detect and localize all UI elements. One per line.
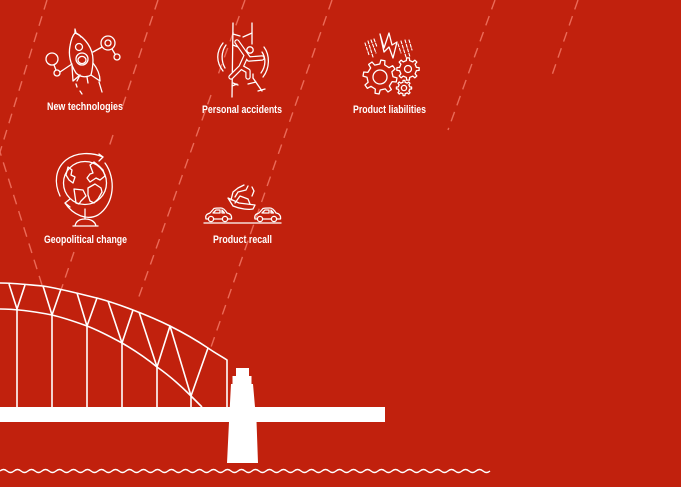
label: Product liabilities: Product liabilities bbox=[353, 104, 426, 116]
water wave bbox=[0, 470, 490, 472]
icon: falling from ladder bbox=[218, 23, 268, 97]
icon: rocket bbox=[46, 29, 120, 94]
icon: cars bbox=[204, 185, 281, 223]
label: New technologies: New technologies bbox=[47, 101, 123, 113]
icon: globe bbox=[56, 154, 112, 226]
bridge arch truss bbox=[0, 283, 227, 407]
bridge deck bbox=[0, 407, 385, 422]
label: Geopolitical change: Geopolitical change bbox=[44, 234, 127, 246]
label: Product recall: Product recall bbox=[213, 234, 272, 246]
bridge tower bbox=[227, 368, 258, 463]
label: Personal accidents: Personal accidents bbox=[202, 104, 282, 116]
icon: gears and lightning bbox=[360, 33, 419, 97]
